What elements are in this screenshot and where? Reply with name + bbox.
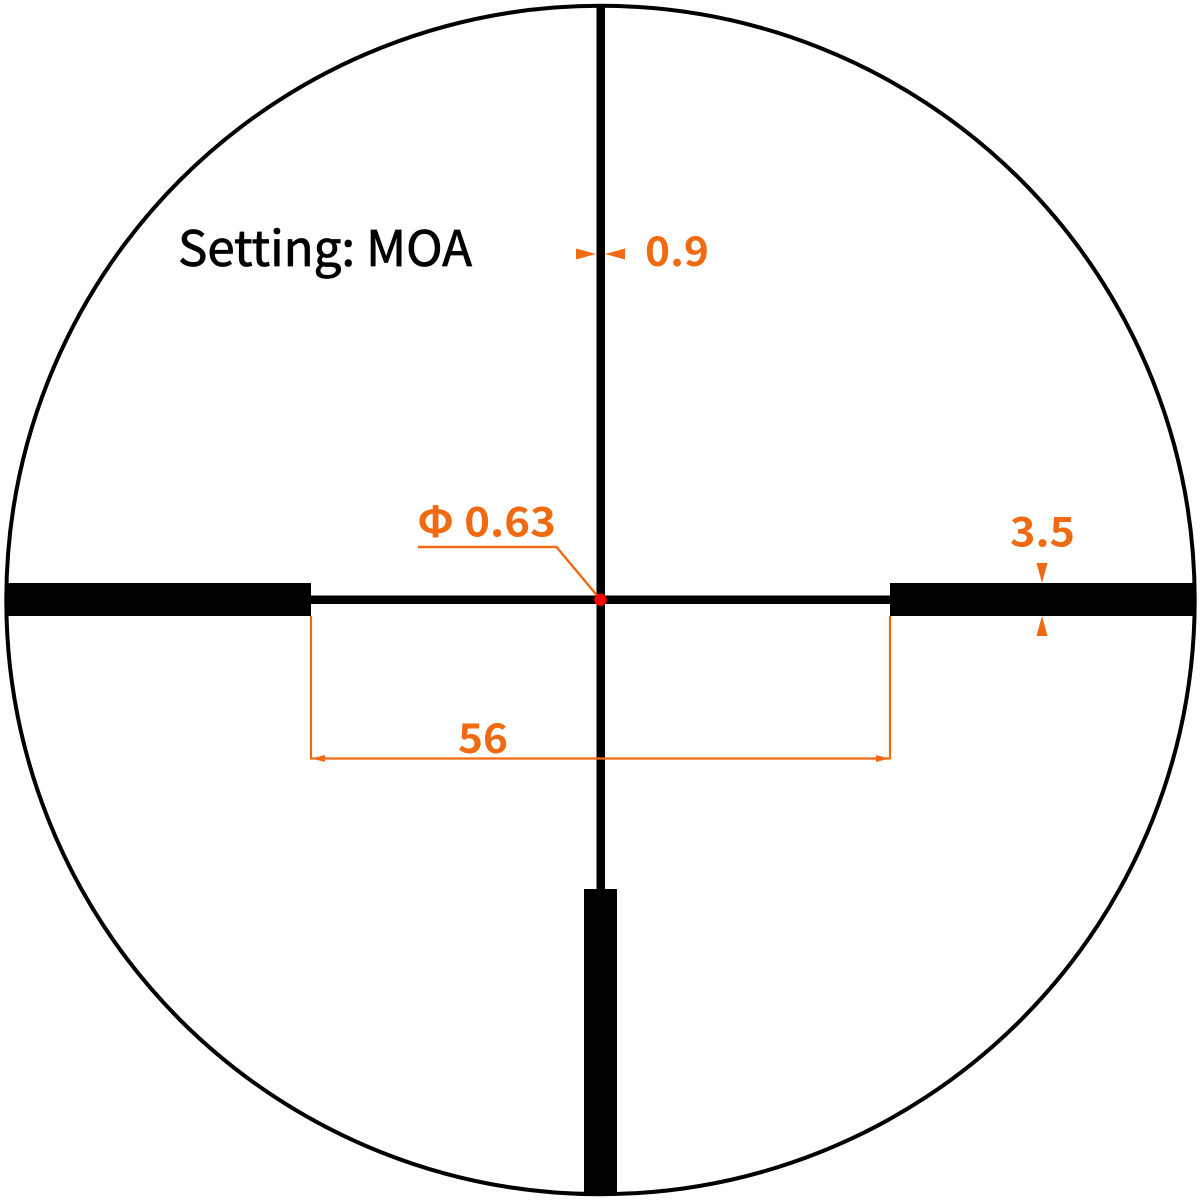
left thick post (6, 583, 311, 616)
dimension: post thickness 3.5: 3.5 (1010, 498, 1075, 558)
vertical crosshair (596, 6, 605, 896)
dimension: line width 0.9 (576, 218, 709, 278)
right thick post (890, 583, 1195, 616)
dimension: centre dot 0.63 (417, 488, 607, 606)
dimension: centre dot 0.63: Φ 0.63 (417, 488, 556, 548)
dimension: post gap 56: 56 (458, 705, 508, 765)
bottom thick post (584, 889, 617, 1195)
horizontal crosshair (305, 596, 895, 604)
dimension: post gap 56 (311, 616, 890, 765)
dimension: line width 0.9: 0.9 (645, 218, 709, 278)
setting label: Setting: MOA (178, 210, 472, 281)
dimension: post thickness 3.5 (1010, 498, 1075, 636)
